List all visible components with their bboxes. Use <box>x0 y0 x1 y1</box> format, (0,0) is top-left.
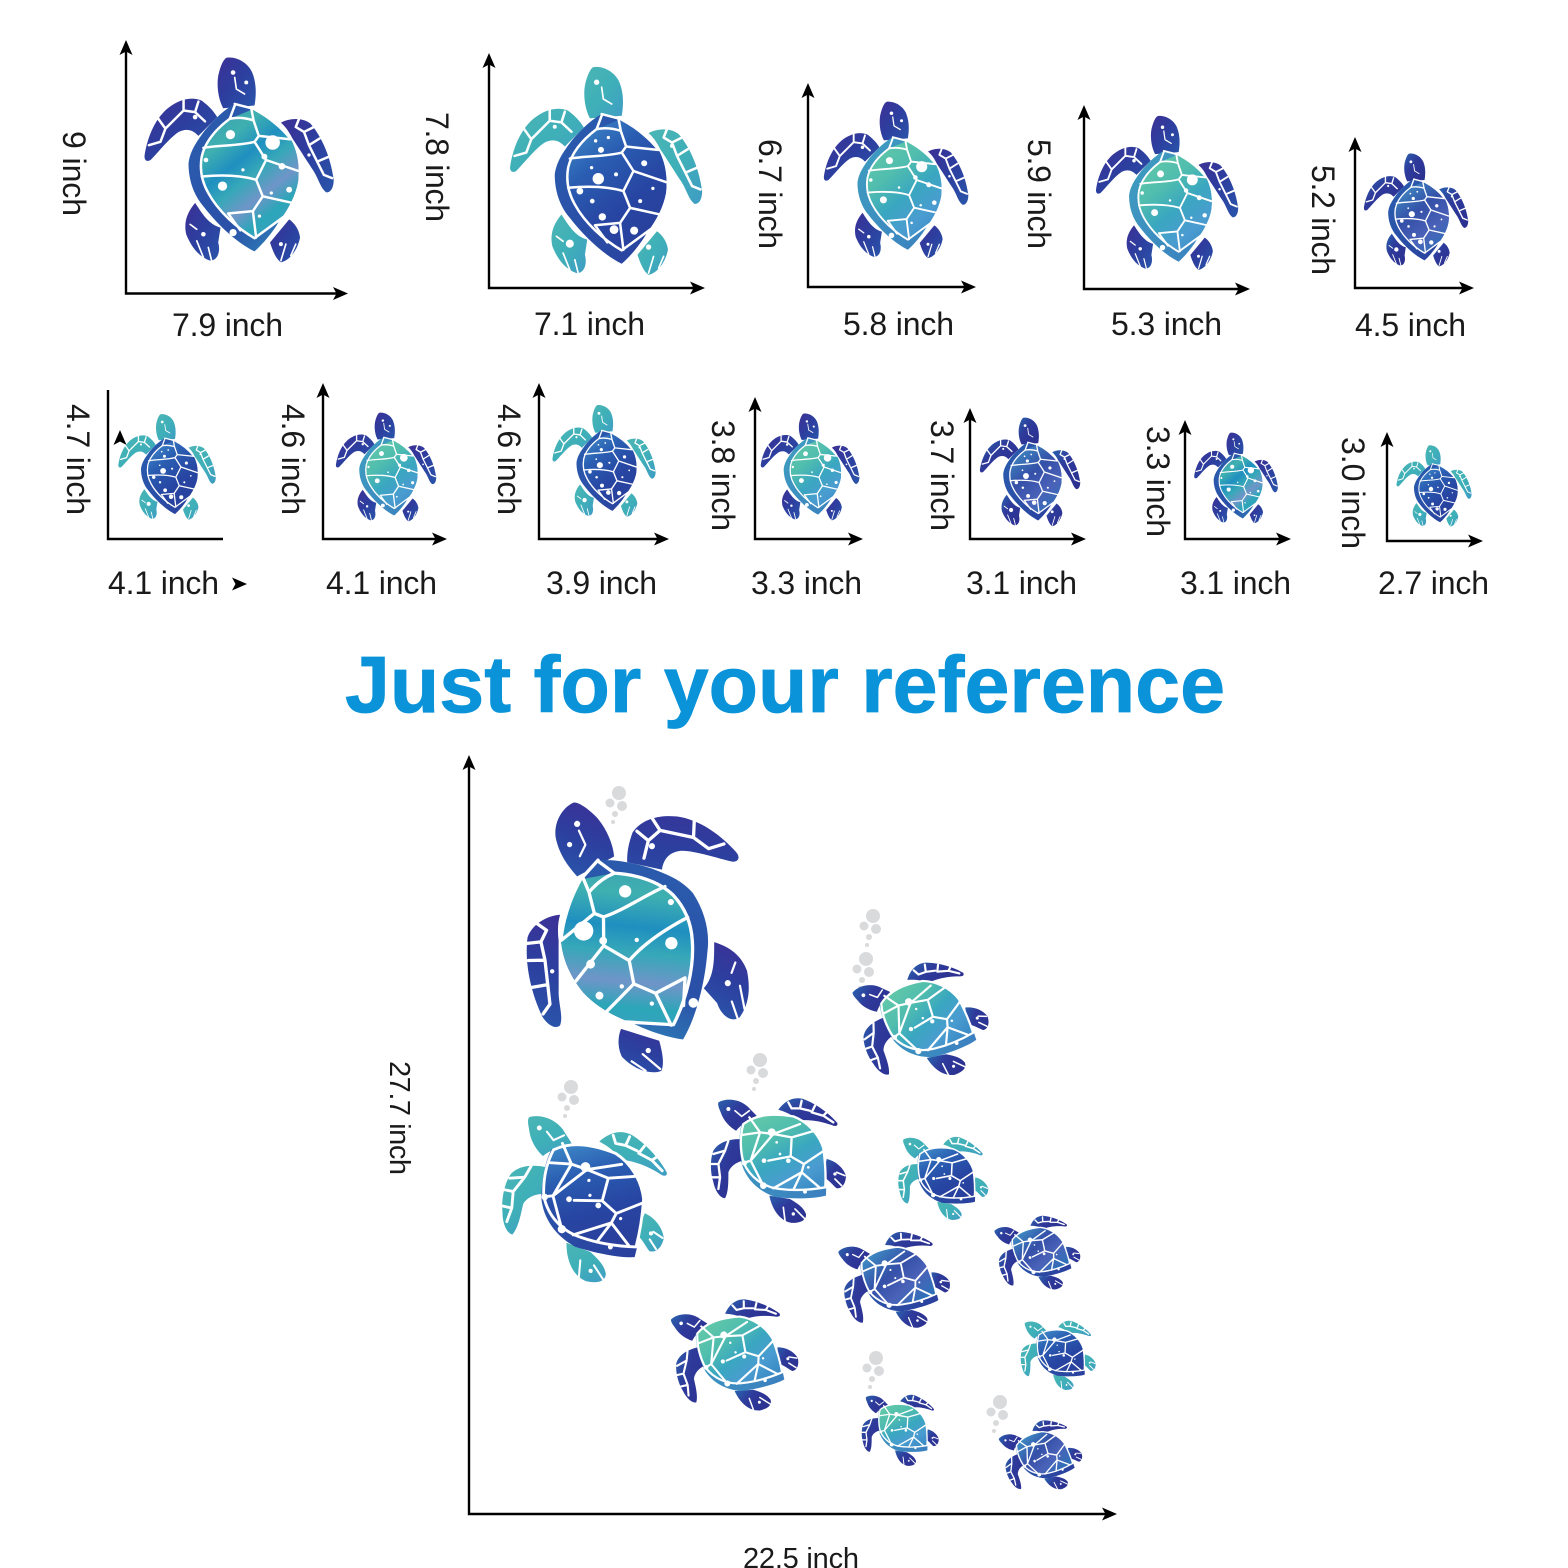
size chart: 5.2 x 4.5 inch: 5.2 inch <box>1305 165 1341 275</box>
size chart: 4.6 x 3.9 inch <box>491 383 669 601</box>
size chart: 3.7 x 3.1 inch: 3.1 inch <box>966 565 1077 601</box>
size chart: 6.7 x 5.8 inch: 5.8 inch <box>843 306 954 342</box>
size chart: 5.2 x 4.5 inch <box>1305 137 1474 343</box>
size chart: 3.3 x 3.1 inch <box>1140 420 1291 601</box>
title: Just for your reference <box>345 640 1225 729</box>
size chart: 3.8 x 3.3 inch <box>705 397 863 601</box>
size chart: 5.2 x 4.5 inch: 4.5 inch <box>1355 307 1466 343</box>
size chart: 3.0 x 2.7 inch: 3.0 inch <box>1335 437 1371 549</box>
size chart: 4.7 x 4.1 inch: 4.7 inch <box>60 404 96 515</box>
size chart: 3.8 x 3.3 inch: 3.8 inch <box>705 420 741 531</box>
size chart: 6.7 x 5.8 inch <box>752 83 976 342</box>
size chart: 4.7 x 4.1 inch <box>60 390 247 601</box>
size chart: 7.8 x 7.1 inch <box>419 53 705 342</box>
panel: top row sizes <box>56 40 1474 343</box>
size chart: 9 x 7.9 inch: 9 inch <box>56 131 92 216</box>
size chart: 3.0 x 2.7 inch: 2.7 inch <box>1378 565 1489 601</box>
size chart: 4.6 x 4.1 inch <box>275 383 447 601</box>
size chart: 5.9 x 5.3 inch <box>1021 105 1250 342</box>
size chart: 6.7 x 5.8 inch: 6.7 inch <box>752 139 788 249</box>
label: overall height: 27.7 inch <box>383 1061 415 1175</box>
size chart: 5.9 x 5.3 inch: 5.3 inch <box>1111 306 1222 342</box>
size chart: 3.3 x 3.1 inch: 3.1 inch <box>1180 565 1291 601</box>
axes: overall dimensions <box>462 755 1117 1520</box>
panel: second row sizes <box>60 383 1489 601</box>
size chart: 4.6 x 3.9 inch: 4.6 inch <box>491 404 527 515</box>
size chart: 4.6 x 4.1 inch: 4.1 inch <box>326 565 437 601</box>
size chart: 3.3 x 3.1 inch: 3.3 inch <box>1140 426 1176 537</box>
bubbles <box>558 786 1008 1433</box>
size chart: 3.7 x 3.1 inch: 3.7 inch <box>924 420 960 531</box>
panel: full set layout <box>383 743 1117 1568</box>
size chart: 5.9 x 5.3 inch: 5.9 inch <box>1021 139 1057 249</box>
size chart: 3.8 x 3.3 inch: 3.3 inch <box>751 565 862 601</box>
size chart: 4.7 x 4.1 inch: 4.1 inch <box>108 565 219 601</box>
turtles arranged <box>454 743 1096 1505</box>
size chart: 4.6 x 4.1 inch: 4.6 inch <box>275 404 311 515</box>
size chart: 7.8 x 7.1 inch: 7.8 inch <box>419 112 455 222</box>
size chart: 9 x 7.9 inch: 7.9 inch <box>172 307 283 343</box>
size chart: 4.6 x 3.9 inch: 3.9 inch <box>546 565 657 601</box>
size chart: 7.8 x 7.1 inch: 7.1 inch <box>534 306 645 342</box>
size chart: 3.0 x 2.7 inch <box>1335 432 1489 601</box>
size chart: 3.7 x 3.1 inch <box>924 408 1086 601</box>
size chart: 9 x 7.9 inch <box>56 40 348 343</box>
